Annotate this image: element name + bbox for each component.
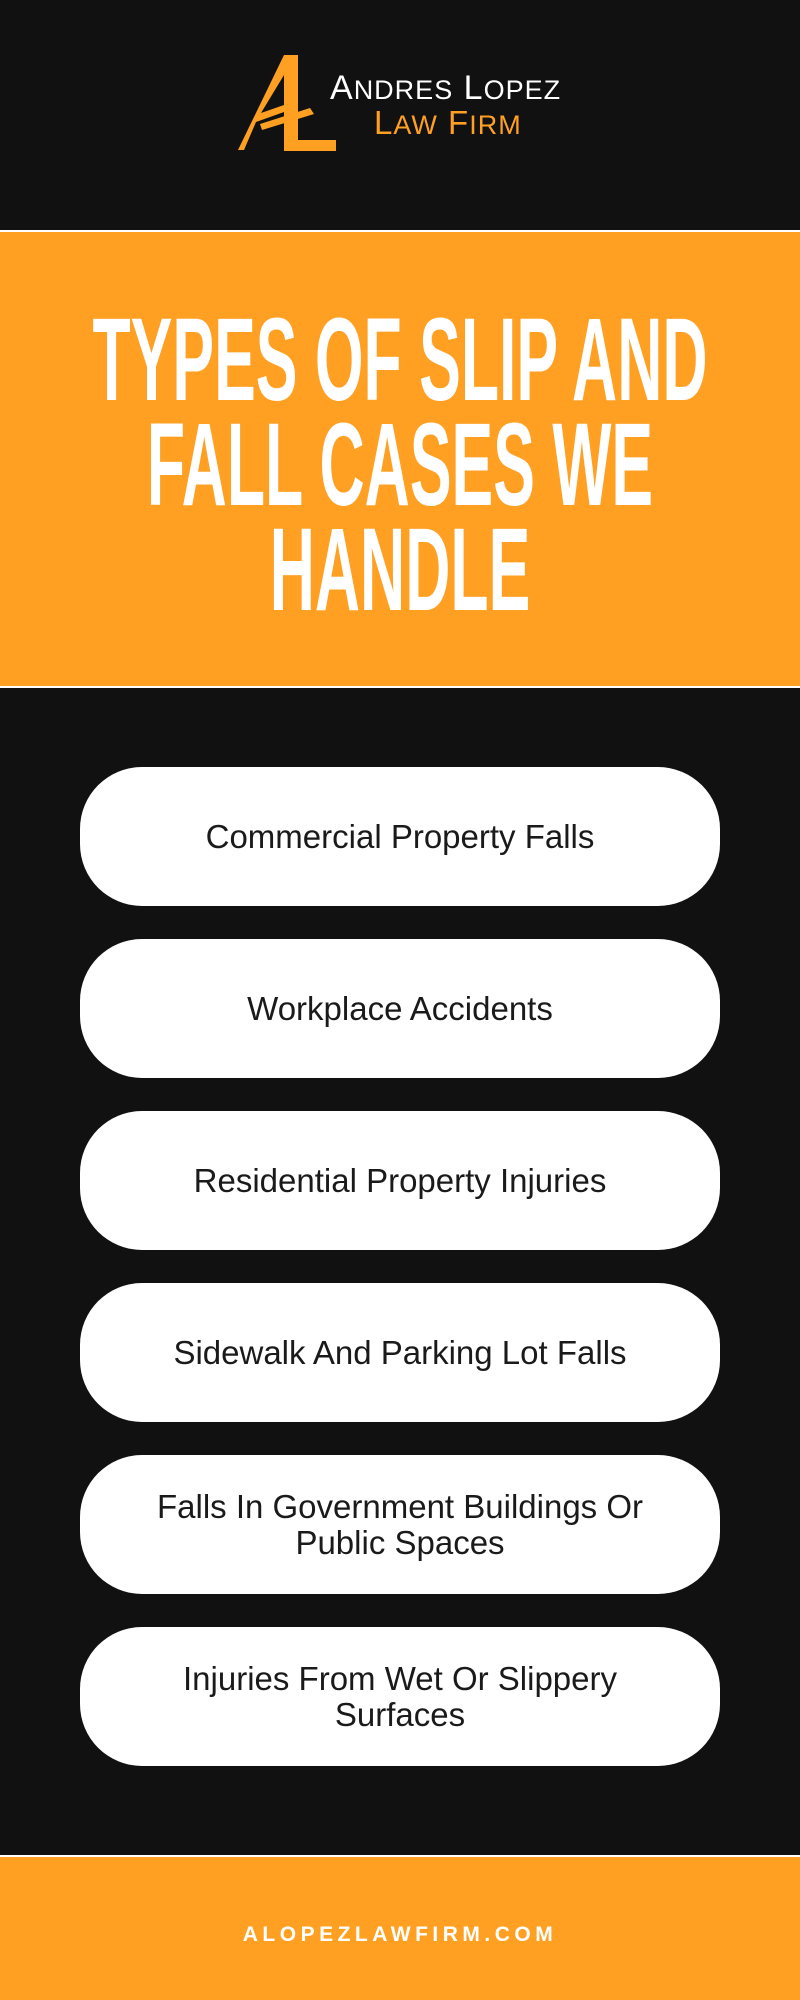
logo (238, 55, 561, 151)
pill: residential (80, 1111, 720, 1250)
pill: sidewalk: Sidewalk And Parking Lot Falls (173, 1334, 627, 1370)
title (92, 294, 708, 636)
logo: LAW FIRM (374, 104, 522, 141)
pill: residential: Residential Property Injuries (194, 1162, 606, 1198)
pill: government: Falls In Government Buildings Or Public Spaces (157, 1488, 643, 1560)
pill: wet surfaces: Injuries From Wet Or Slippery Surfaces (183, 1660, 617, 1732)
footer url: ALOPEZLAWFIRM.COM (243, 1923, 557, 1946)
logo text: ANDRES LOPEZ (330, 69, 561, 107)
pill: sidewalk (80, 1283, 720, 1422)
pill: workplace (80, 939, 720, 1078)
header bar (0, 0, 800, 230)
title panel (0, 232, 800, 686)
pill: workplace: Workplace Accidents (247, 990, 553, 1026)
title: HANDLE (270, 504, 530, 636)
pill: government (80, 1455, 720, 1594)
pill: commercial (80, 767, 720, 906)
title: FALL CASES WE (147, 399, 653, 531)
icon: AL monogram (238, 55, 336, 151)
footer (0, 1857, 800, 2000)
pill: commercial: Commercial Property Falls (206, 818, 594, 854)
title: TYPES OF SLIP AND (92, 294, 708, 426)
pill: wet surfaces (80, 1627, 720, 1766)
